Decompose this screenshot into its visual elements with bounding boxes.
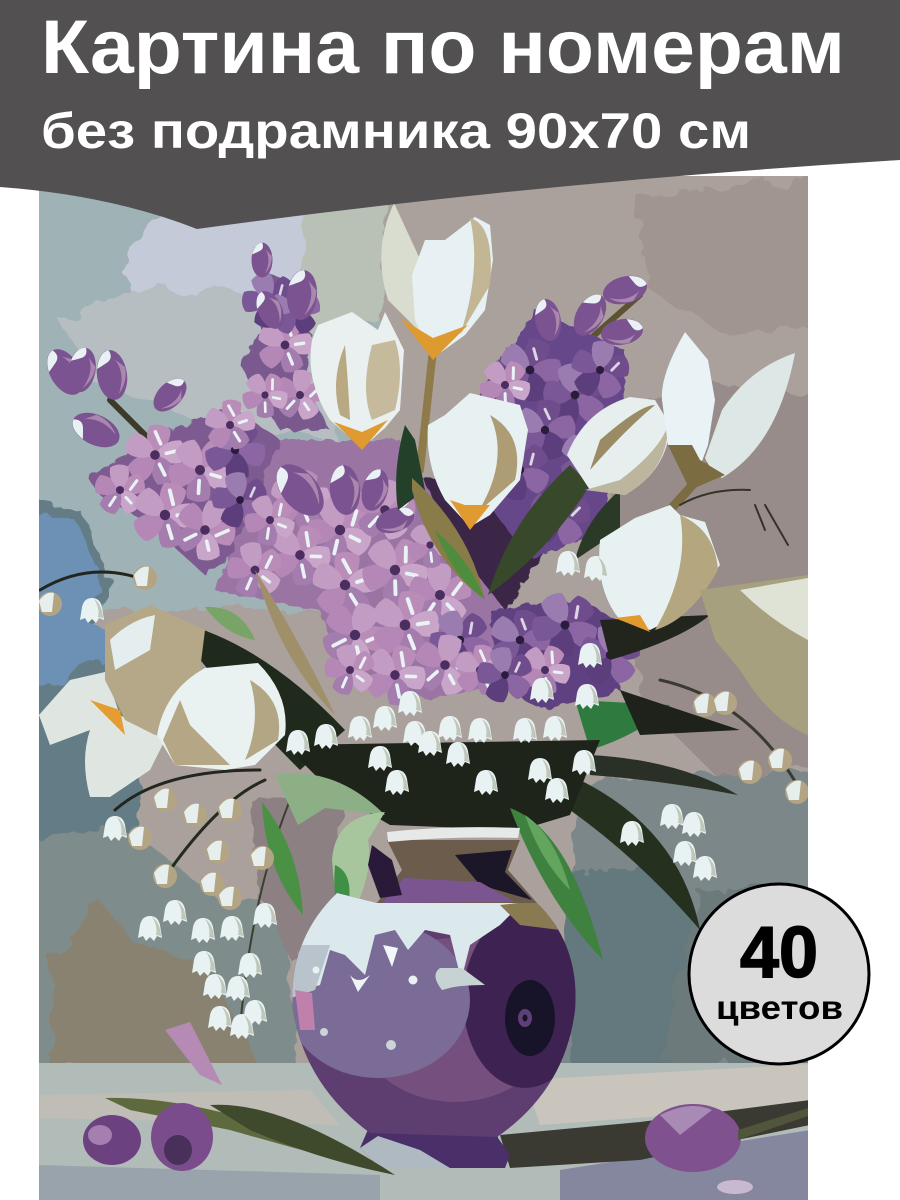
florets: right clusters [477, 339, 640, 702]
badge: 40 colours [689, 884, 869, 1064]
subtitle: без подрамника 90х70 см [41, 102, 751, 159]
hyacinth masses [40, 242, 650, 717]
fallen flowers [83, 1022, 808, 1194]
badge: 40 colours: 40 [740, 913, 818, 993]
lower right tulip [599, 505, 720, 632]
tulip near left [157, 663, 286, 770]
vase body [292, 893, 576, 1137]
title: Картина по номерам [41, 5, 845, 90]
table [20, 1063, 820, 1200]
painting [10, 150, 830, 1200]
florets: central cluster [227, 470, 493, 706]
faded right tulip [700, 575, 808, 735]
hanging tan bells [38, 566, 809, 910]
header banner [0, 0, 900, 229]
stems and back leaves [40, 295, 800, 1030]
far right open tulip [662, 332, 795, 490]
leaves [170, 425, 740, 960]
white tulips [39, 203, 808, 797]
badge: 40 colours: цветов [716, 989, 843, 1026]
vase neck [377, 840, 537, 903]
vase [285, 827, 587, 1168]
lily of the valley bells [80, 551, 717, 1039]
vase foot [360, 1131, 510, 1168]
left-centre tulip [310, 312, 404, 450]
right tulip [567, 397, 670, 495]
painting background [10, 150, 830, 1200]
hyacinth buds [40, 242, 650, 538]
florets: left cluster [94, 272, 320, 560]
left open tulip [39, 605, 205, 797]
top tulip [381, 203, 493, 360]
centre tulip [428, 393, 528, 530]
